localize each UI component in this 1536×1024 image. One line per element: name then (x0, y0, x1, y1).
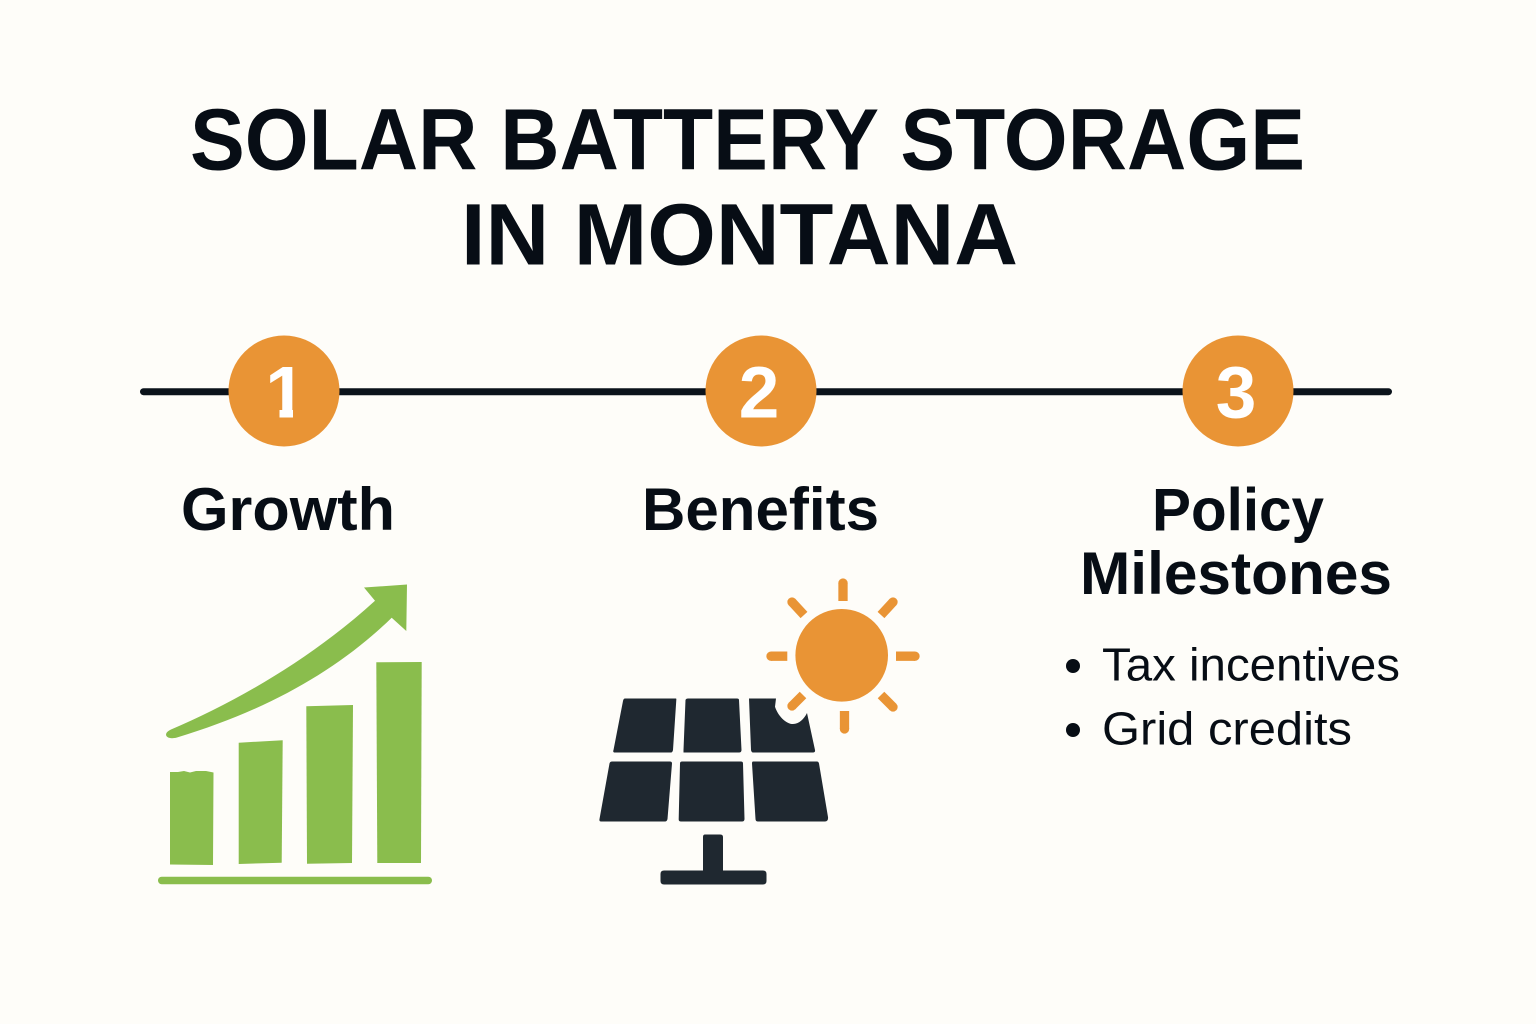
step 3 marker: 3 (1216, 352, 1256, 434)
step 1 marker: 1 (265, 352, 306, 434)
growth arrow (166, 584, 407, 738)
bullet list (1066, 638, 1400, 754)
timeline (144, 336, 1388, 446)
step 2 marker: 2 (739, 352, 779, 434)
heading: Policy Milestones: Milestones (1080, 540, 1392, 607)
title: IN MONTANA (461, 186, 1018, 284)
bullet list: Grid credits (1102, 702, 1352, 754)
icon: growth bar chart (158, 584, 432, 884)
step 1 marker (228, 336, 340, 446)
heading: Benefits: Benefits (642, 476, 879, 543)
icon: sun (766, 578, 920, 734)
step 2 marker (706, 336, 816, 446)
title (190, 92, 1305, 284)
chart baseline (158, 877, 432, 884)
heading: Growth: Growth (181, 476, 395, 543)
step 3 marker (1182, 336, 1294, 446)
chart bars (170, 662, 422, 865)
heading: Policy Milestones: Policy (1152, 476, 1325, 544)
heading: Policy Milestones (1080, 476, 1392, 607)
title: SOLAR BATTERY STORAGE (190, 92, 1305, 188)
bullet list: Tax incentives (1102, 638, 1400, 690)
icon: solar panel (599, 698, 828, 884)
